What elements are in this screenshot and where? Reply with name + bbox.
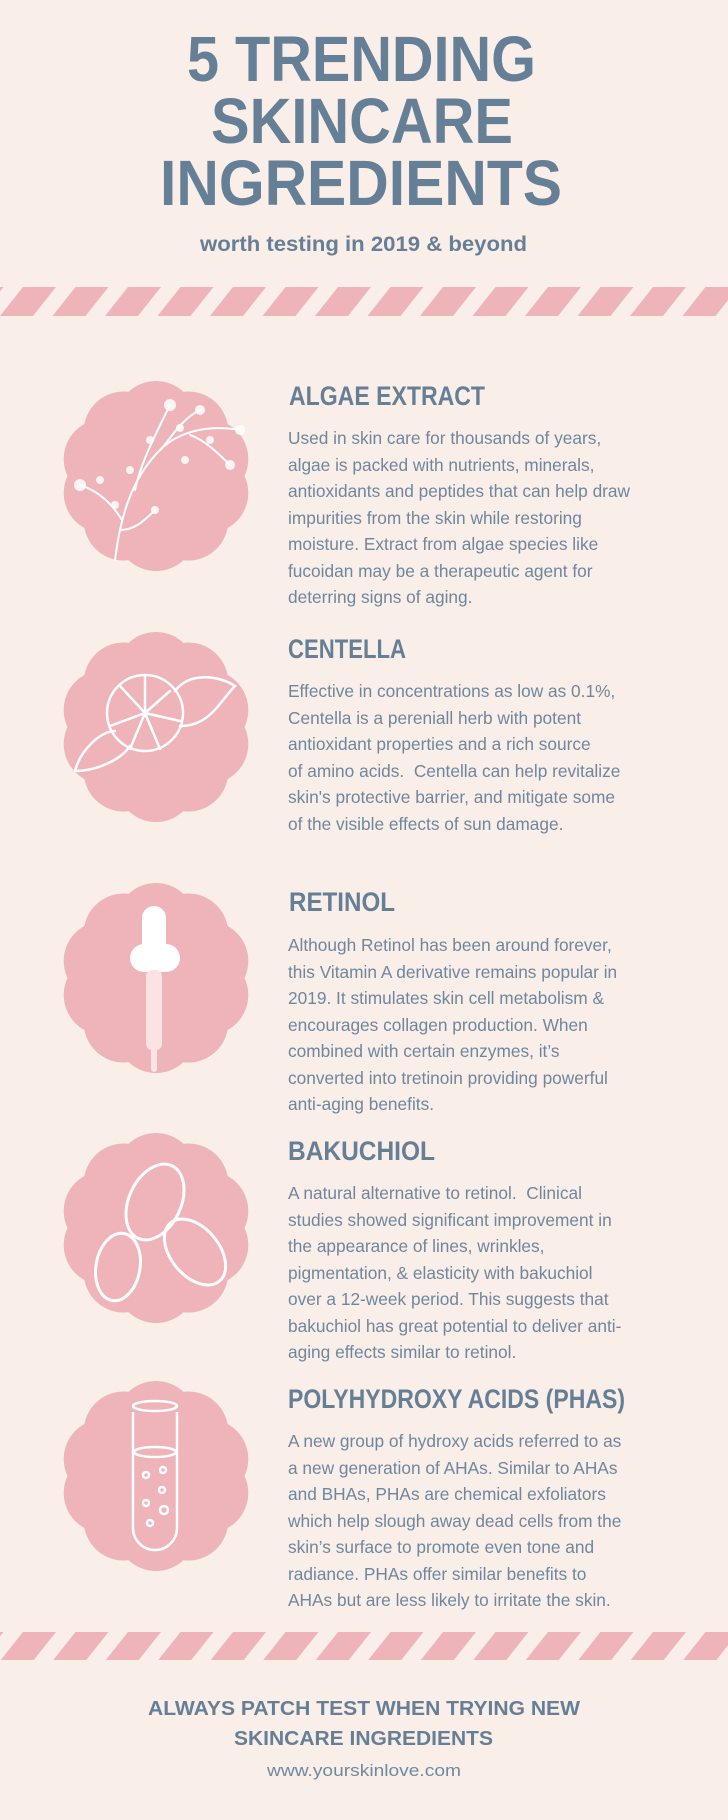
text: phas: which help slough away dead cells from the (288, 1510, 621, 1530)
heading: bakuchiol: BAKUCHIOL (288, 1136, 435, 1166)
text: centella (288, 681, 620, 834)
text: phas: and BHAs, PHAs are chemical exfoliators (288, 1484, 606, 1504)
title: 5 TRENDING (187, 23, 536, 95)
text: centella: of the visible effects of sun damage. (288, 814, 563, 834)
heading: algae extract: ALGAE EXTRACT (289, 381, 485, 411)
text: algae: moisture. Extract from algae species like (288, 534, 598, 554)
icon: algae badge (64, 381, 248, 571)
text: retinol: converted into tretinoin providing powerful (288, 1068, 608, 1088)
text: centella: skin's protective barrier, and mitigate some (288, 787, 615, 807)
footer: patch test note (148, 1698, 580, 1750)
footer: patch test note: ALWAYS PATCH TEST WHEN TRYING NEW (148, 1698, 580, 1720)
text: bakuchiol: pigmentation, & elasticity with bakuchiol (288, 1262, 592, 1282)
heading: centella: CENTELLA (288, 634, 406, 664)
title: INGREDIENTS (160, 147, 562, 219)
panel: bakuchiol (64, 1133, 621, 1362)
icon: test tube badge (64, 1381, 248, 1571)
text: bakuchiol: A natural alternative to retinol. Clinical (288, 1183, 582, 1203)
text: algae: antioxidants and peptides that can help draw (288, 481, 630, 501)
text: phas: skin’s surface to promote even tone and (288, 1537, 594, 1557)
text: bakuchiol (288, 1183, 621, 1362)
icon: centella flower badge (64, 632, 248, 822)
panel: retinol (64, 883, 617, 1114)
footer: patch test note: SKINCARE INGREDIENTS (234, 1728, 493, 1750)
text: phas: A new group of hydroxy acids referred to as (288, 1431, 621, 1451)
text: algae: algae is packed with nutrients, minerals, (288, 454, 594, 474)
text: phas: a new generation of AHAs. Similar to AHAs (288, 1458, 617, 1478)
text: algae: deterring signs of aging. (288, 587, 472, 607)
text: phas: radiance. PHAs offer similar benefits to (288, 1564, 586, 1584)
panel: polyhydroxy acids (64, 1381, 625, 1610)
text: algae (288, 428, 630, 607)
panel: algae extract (64, 381, 630, 607)
text: bakuchiol: over a 12-week period. This suggests that (288, 1289, 609, 1309)
subtitle: worth testing in 2019 & beyond (199, 233, 527, 256)
text: centella: Centella is a pereniall herb with potent (288, 708, 581, 728)
text: bakuchiol: studies showed significant improvement in (288, 1210, 612, 1230)
text: bakuchiol: bakuchiol has great potential to deliver anti- (288, 1316, 621, 1336)
title: SKINCARE (211, 85, 513, 157)
text: algae: Used in skin care for thousands of years, (288, 428, 601, 448)
footer: website url: www.yourskinlove.com (266, 1761, 461, 1780)
text: algae: impurities from the skin while restoring (288, 508, 582, 528)
text: centella: antioxidant properties and a rich source (288, 734, 591, 754)
icon: dropper badge (64, 883, 248, 1073)
text: centella: of amino acids. Centella can help revitalize (288, 760, 620, 780)
text: retinol (288, 935, 617, 1114)
text: algae: fucoidan may be a therapeutic agent for (288, 560, 593, 580)
title (160, 23, 562, 219)
text: retinol: encourages collagen production. When (288, 1014, 588, 1034)
panel: centella (64, 632, 620, 834)
heading: polyhydroxy acids: POLYHYDROXY ACIDS (PHAS) (288, 1384, 625, 1414)
icon: seeds badge (64, 1133, 248, 1323)
text: centella: Effective in concentrations as low as 0.1%, (288, 681, 615, 701)
text: retinol: combined with certain enzymes, it’s (288, 1041, 560, 1061)
heading: retinol: RETINOL (289, 887, 395, 917)
text: bakuchiol: aging effects similar to retinol. (288, 1342, 516, 1362)
text: retinol: Although Retinol has been around forever, (288, 935, 612, 955)
text: retinol: anti-aging benefits. (288, 1094, 434, 1114)
text: bakuchiol: the appearance of lines, wrinkles, (288, 1236, 544, 1256)
text: retinol: this Vitamin A derivative remains popular in (288, 962, 617, 982)
text: retinol: 2019. It stimulates skin cell metabolism & (288, 988, 604, 1008)
text: phas: AHAs but are less likely to irritate the skin. (288, 1590, 611, 1610)
text: phas (288, 1431, 621, 1610)
